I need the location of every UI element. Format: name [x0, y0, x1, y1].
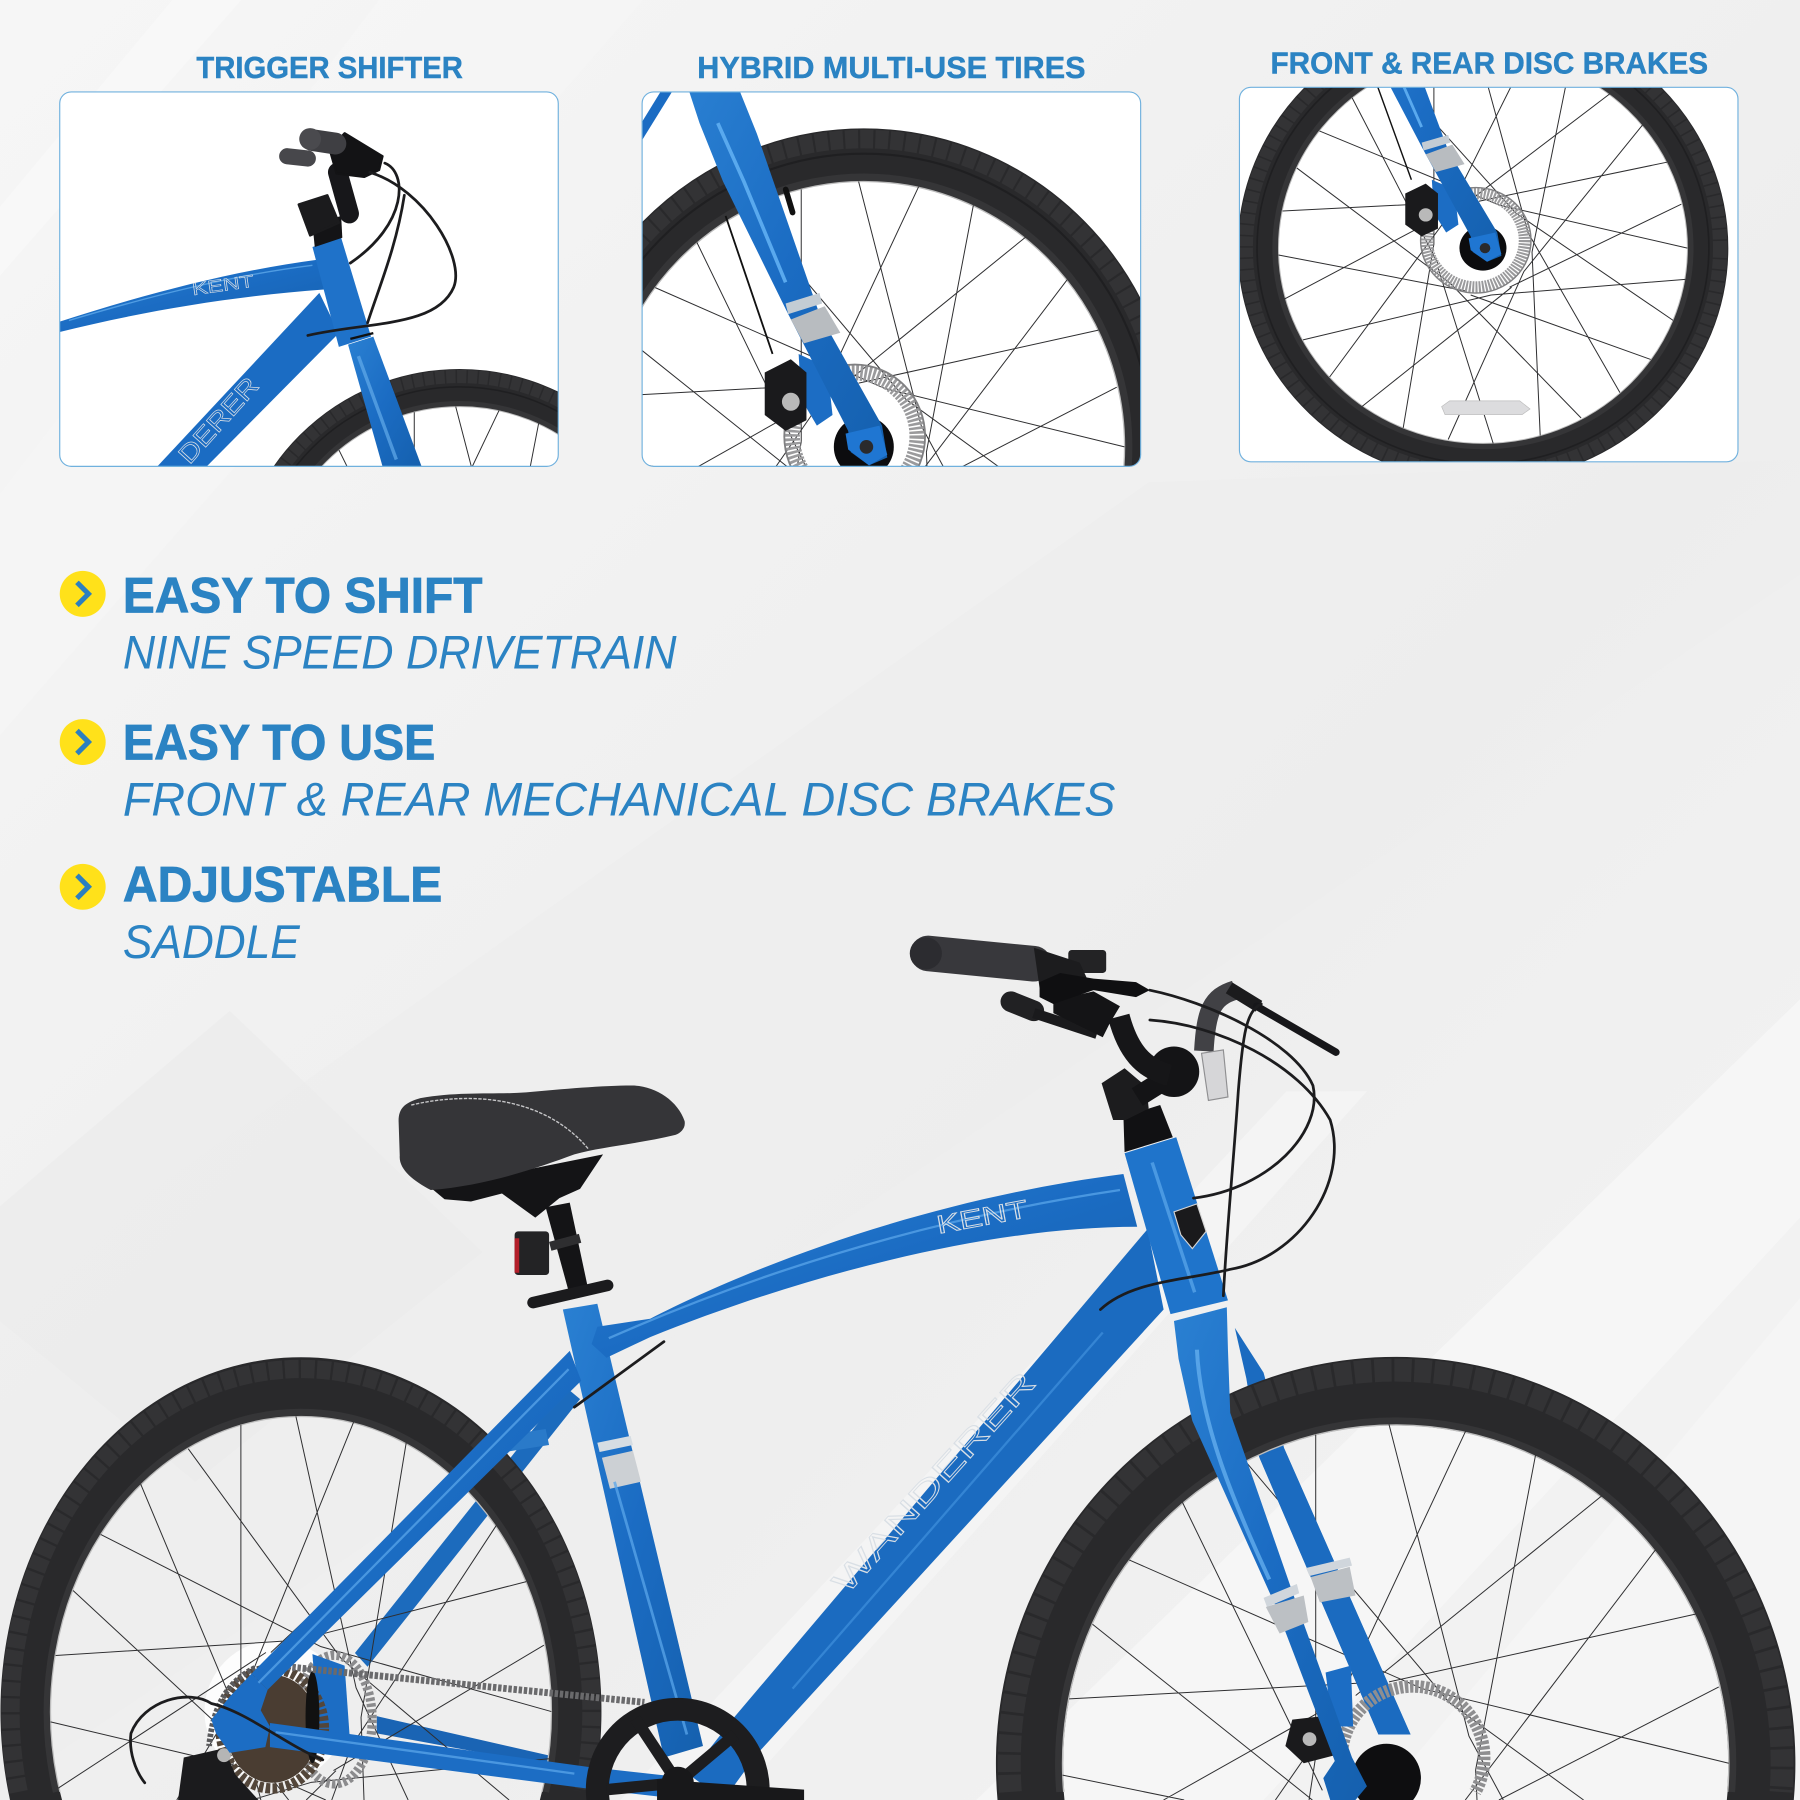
rear wheel: [0, 1357, 601, 1800]
rear cable: [131, 1697, 323, 1783]
heading: front and rear disc brakes: FRONT & REAR DISC BRAKES: [1270, 47, 1708, 81]
panel: trigger shifter: KENT: [191, 271, 256, 299]
fork: rear blade: [1235, 1328, 1411, 1735]
main bike photo illustration: [0, 937, 1795, 1800]
panel: trigger shifter: [59, 56, 559, 467]
heading: hybrid multi-use tires: HYBRID MULTI-USE TIRES: [697, 51, 1086, 85]
frame bridge: [502, 1429, 549, 1452]
heading: trigger shifter: TRIGGER SHIFTER: [196, 51, 463, 85]
feature: easy to shift: NINE SPEED DRIVETRAIN: [123, 626, 678, 679]
reflector: [1202, 1050, 1228, 1100]
handlebar grips and levers: [910, 937, 1336, 1052]
front disc brake and hub: [1285, 1666, 1484, 1800]
feature: easy to shift: [60, 567, 678, 679]
frame: down tube: [689, 1229, 1164, 1800]
feature list: [60, 567, 1115, 968]
brake and shift cables: [574, 990, 1334, 1407]
feature: easy to shift: EASY TO SHIFT: [123, 567, 482, 623]
frame: seat stay: [252, 1351, 581, 1690]
feature: easy to use: [60, 714, 1115, 826]
frame: head tube: [1125, 1137, 1228, 1314]
fork: rear blade lower section: [1259, 1449, 1411, 1735]
feature: easy to use: FRONT & REAR MECHANICAL DISC BRAKES: [123, 773, 1115, 826]
chain: [209, 1667, 644, 1746]
chainring and crank: [586, 1698, 804, 1800]
panel: hybrid multi-use tires: [642, 56, 1142, 467]
frame: chain stay: [270, 1723, 689, 1800]
frame: top tube: [592, 1174, 1137, 1358]
frame logo: KENT: KENT: [934, 1195, 1030, 1240]
seat post and clamp: [533, 1203, 608, 1303]
rear light: [515, 1231, 549, 1275]
feature: easy to use: EASY TO USE: [123, 714, 435, 770]
frame logo: WANDERER: WANDERER: [825, 1364, 1042, 1600]
saddle: [399, 1086, 685, 1218]
rear rotor, cassette and derailleur: [178, 1654, 372, 1800]
tube highlights: [258, 1162, 1195, 1774]
front wheel: [996, 1357, 1795, 1800]
feature: adjustable saddle: ADJUSTABLE: [123, 857, 442, 913]
feature: adjustable saddle: SADDLE: [123, 915, 300, 968]
frame: far seat stay and chain stay: [355, 1388, 689, 1800]
frame: seat tube: [563, 1304, 703, 1757]
frame: dropout: [211, 1674, 270, 1753]
fork: front blade: [1174, 1307, 1367, 1800]
head badge: [1174, 1204, 1206, 1249]
fork highlights and reflective bands: [1197, 1350, 1355, 1633]
panel: trigger shifter: DERER: [173, 372, 265, 469]
reflective seat tube bands: [597, 1436, 641, 1489]
panel: front and rear disc brakes: [1238, 52, 1739, 462]
headset and stem: [1102, 1017, 1199, 1152]
feature: adjustable saddle: [60, 857, 442, 968]
